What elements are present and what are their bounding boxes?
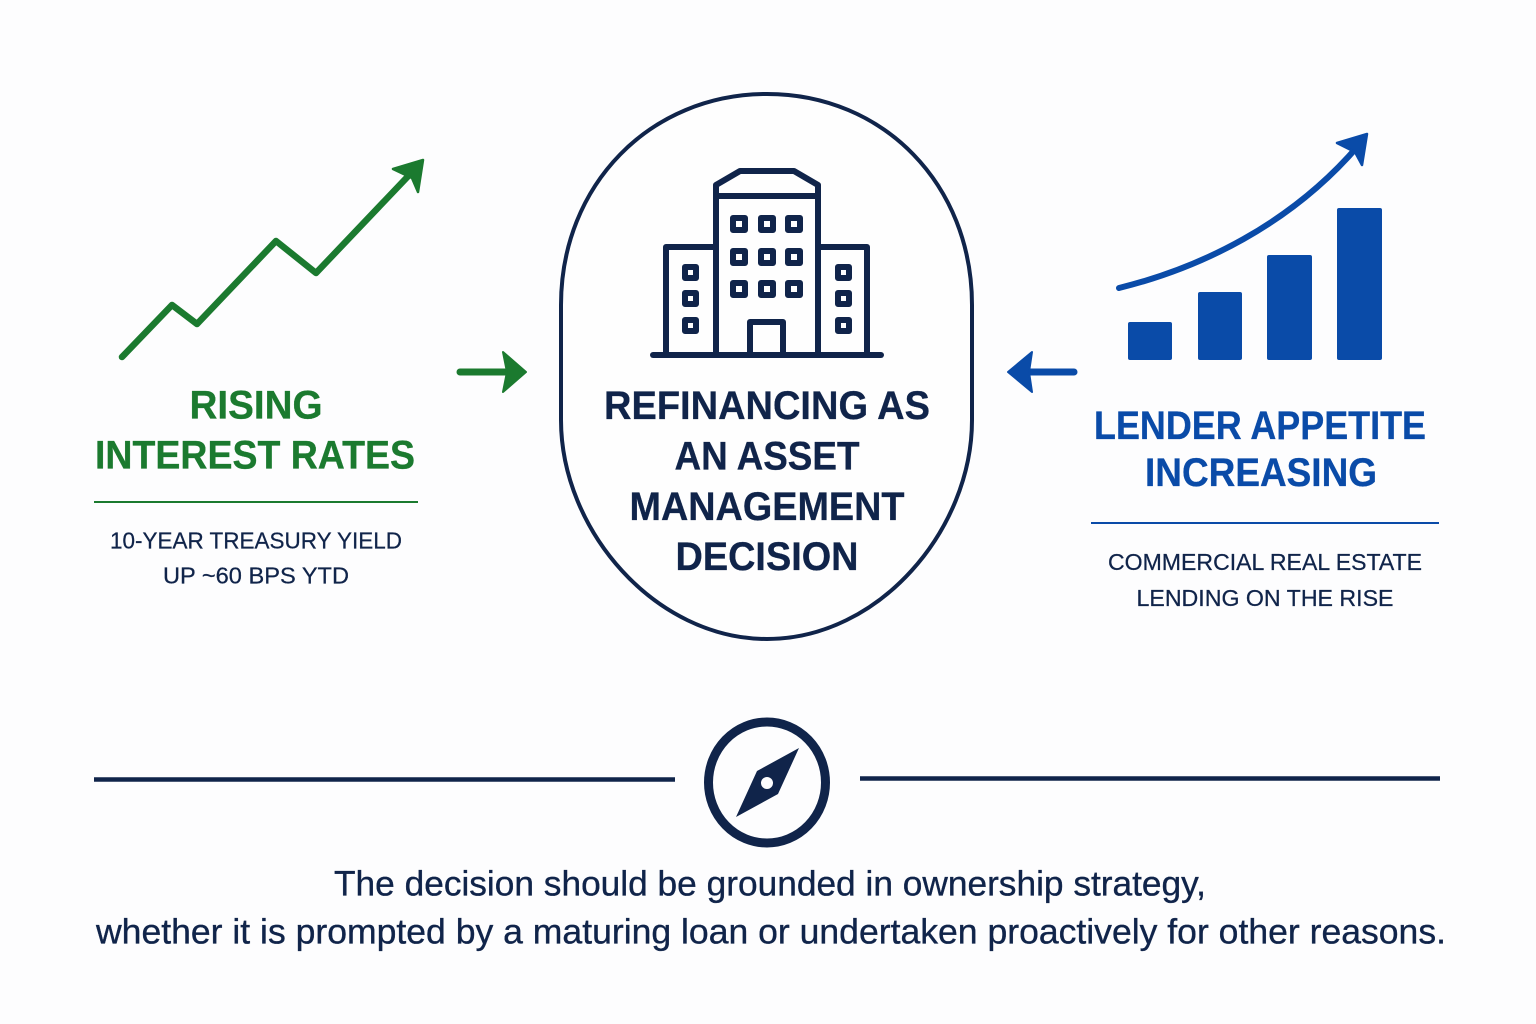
icon: office building <box>653 171 881 355</box>
text: commercial lending detail: COMMERCIAL REAL ESTATE <box>1108 549 1422 575</box>
heading: refinancing as an asset management decision: DECISION <box>676 535 858 579</box>
heading: rising interest rates <box>95 384 415 478</box>
panel: central oval <box>561 94 972 639</box>
arrow: blue pointing to centre <box>1008 352 1074 392</box>
text: closing statement: The decision should be grounded in ownership strategy, <box>334 864 1206 904</box>
text: closing statement: whether it is prompted by a maturing loan or undertaken proactively for other reasons. <box>95 912 1446 952</box>
text: treasury yield detail <box>110 528 402 588</box>
text: commercial lending detail: LENDING ON THE RISE <box>1136 585 1394 611</box>
icon: bar chart with rising arrow <box>1119 134 1382 360</box>
text: treasury yield detail: UP ~60 BPS YTD <box>163 562 349 588</box>
heading: rising interest rates: RISING <box>190 384 322 428</box>
heading: refinancing as an asset management decision <box>604 384 930 579</box>
heading: lender appetite increasing: INCREASING <box>1145 451 1377 495</box>
divider with compass <box>94 722 1440 843</box>
oval outline <box>561 94 972 639</box>
heading: refinancing as an asset management decision: REFINANCING AS <box>604 384 930 428</box>
text: treasury yield detail: 10-YEAR TREASURY YIELD <box>110 528 402 554</box>
heading: lender appetite increasing <box>1094 404 1426 495</box>
heading: rising interest rates: INTEREST RATES <box>95 434 415 478</box>
heading: lender appetite increasing: LENDER APPETITE <box>1094 404 1426 448</box>
text: closing statement <box>95 864 1446 952</box>
heading: refinancing as an asset management decision: MANAGEMENT <box>630 485 904 529</box>
panel: lender appetite increasing <box>1091 134 1439 611</box>
arrow: green pointing to centre <box>460 352 526 392</box>
heading: refinancing as an asset management decision: AN ASSET <box>674 434 860 478</box>
icon: compass <box>708 722 826 843</box>
panel: rising interest rates <box>94 160 423 588</box>
icon: green zigzag rising arrow <box>122 160 423 357</box>
text: commercial lending detail <box>1108 549 1422 611</box>
